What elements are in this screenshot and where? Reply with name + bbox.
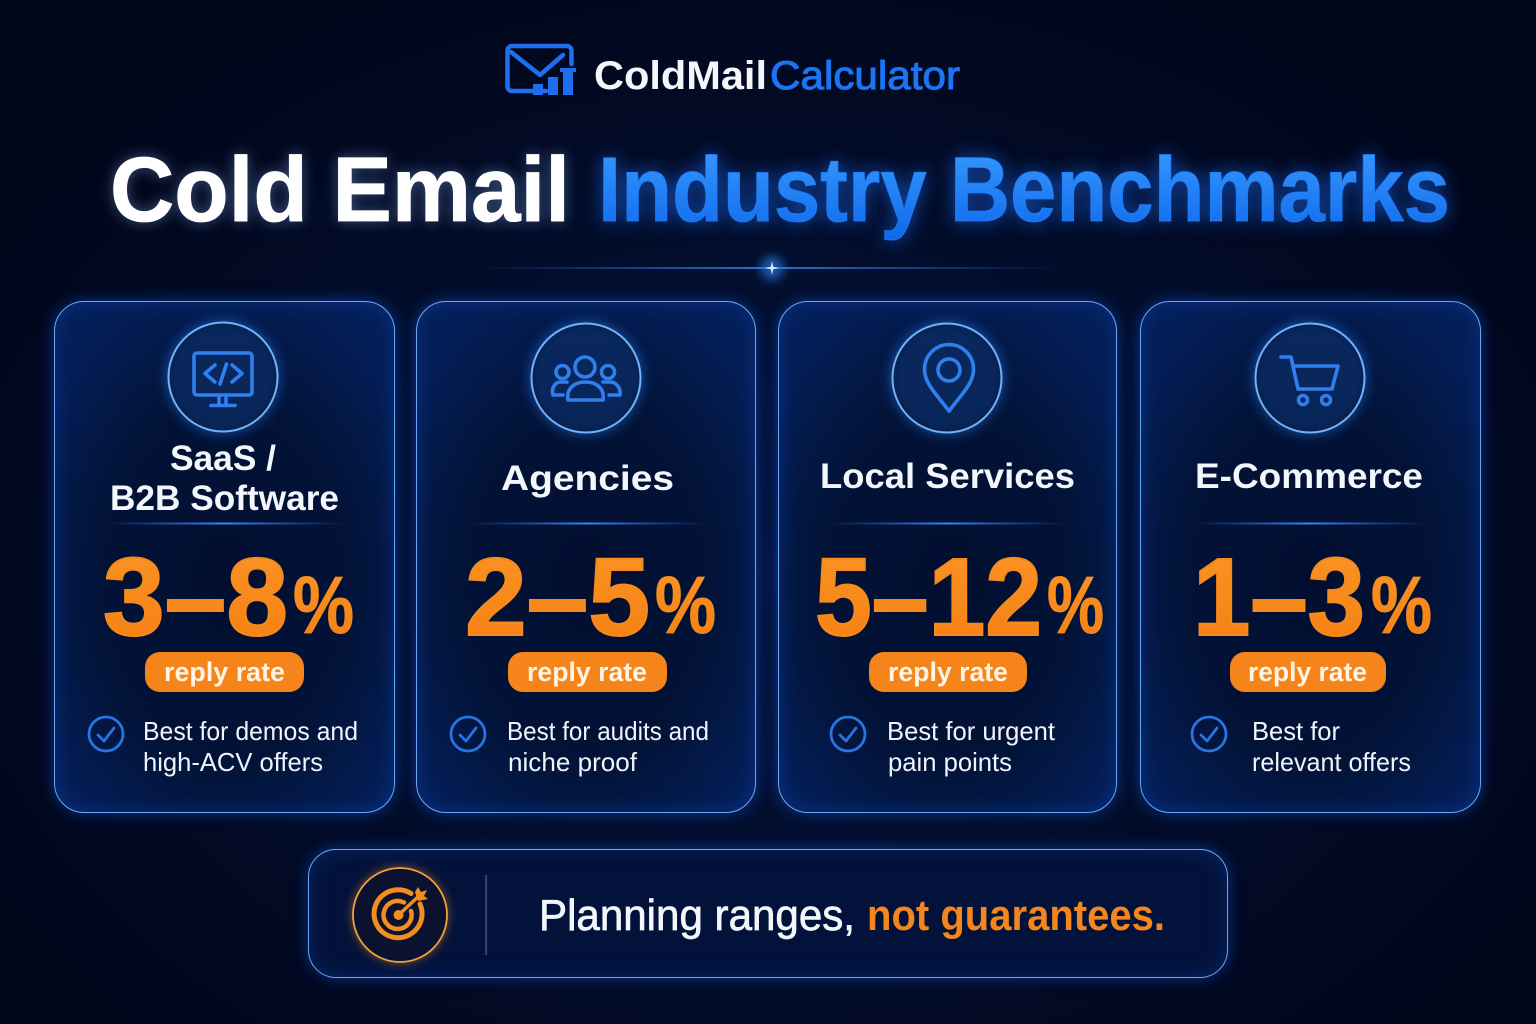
icon: check [830,716,864,750]
heading: Agencies [500,458,674,498]
heading [110,438,338,518]
brand name: Calculator [770,54,960,98]
reply rate value: % [654,560,716,650]
best-for note [506,716,708,776]
callout text: not guarantees. [866,890,1164,940]
icon: code monitor [168,322,277,431]
best-for note [1252,716,1410,776]
reply rate value: 3–8 [102,536,288,658]
title divider with spark [492,250,1048,286]
heading: E-Commerce [1194,456,1422,496]
reply rate pill: reply rate [1248,656,1366,686]
panel: Agencies [416,301,756,813]
icon: envelope with bars [508,46,576,95]
reply rate value: % [1370,560,1432,650]
best-for note: Best for audits and [506,716,708,746]
reply rate pill [1230,652,1386,692]
icon: target with arrow [352,868,446,962]
title: Cold Email [110,139,570,241]
reply rate pill [144,652,304,692]
icon: check [1192,716,1226,750]
best-for note [142,716,358,776]
title [105,139,1458,252]
best-for note: niche proof [508,746,637,776]
reply rate value: 1–3 [1192,536,1364,658]
reply rate pill: reply rate [526,656,646,686]
reply rate value: % [1046,560,1104,650]
best-for note: Best for [1252,716,1340,746]
heading: Local Services [820,456,1074,496]
panel: E-Commerce [1140,301,1481,813]
best-for note: Best for urgent [886,716,1055,746]
panel: Local Services [778,301,1117,813]
best-for note: Best for demos and [142,716,358,746]
title: Industry Benchmarks [598,139,1450,241]
heading: B2B Software [110,478,338,518]
best-for note: high-ACV offers [142,746,322,776]
panel: SaaS / B2B Software [54,301,395,813]
reply rate value: % [292,560,354,650]
reply rate value: 5–12 [814,536,1042,658]
brand name: ColdMail [594,54,767,98]
reply rate pill: reply rate [164,656,284,686]
best-for note: pain points [888,746,1012,776]
reply rate pill [868,652,1026,692]
panel: planning ranges callout [308,849,1228,978]
reply rate pill [508,652,666,692]
icon: check [450,716,484,750]
brand name [594,54,960,98]
icon: people [531,323,640,432]
reply rate pill: reply rate [888,656,1008,686]
best-for note: relevant offers [1252,746,1410,776]
heading: SaaS / [170,438,276,478]
reply rate value: 2–5 [464,536,650,658]
icon: check [88,716,122,750]
best-for note [886,716,1055,776]
icon: shopping cart [1255,323,1364,432]
logo [505,44,960,98]
icon: location pin [892,323,1001,432]
callout text: Planning ranges, [538,890,854,940]
callout text [538,890,1164,940]
